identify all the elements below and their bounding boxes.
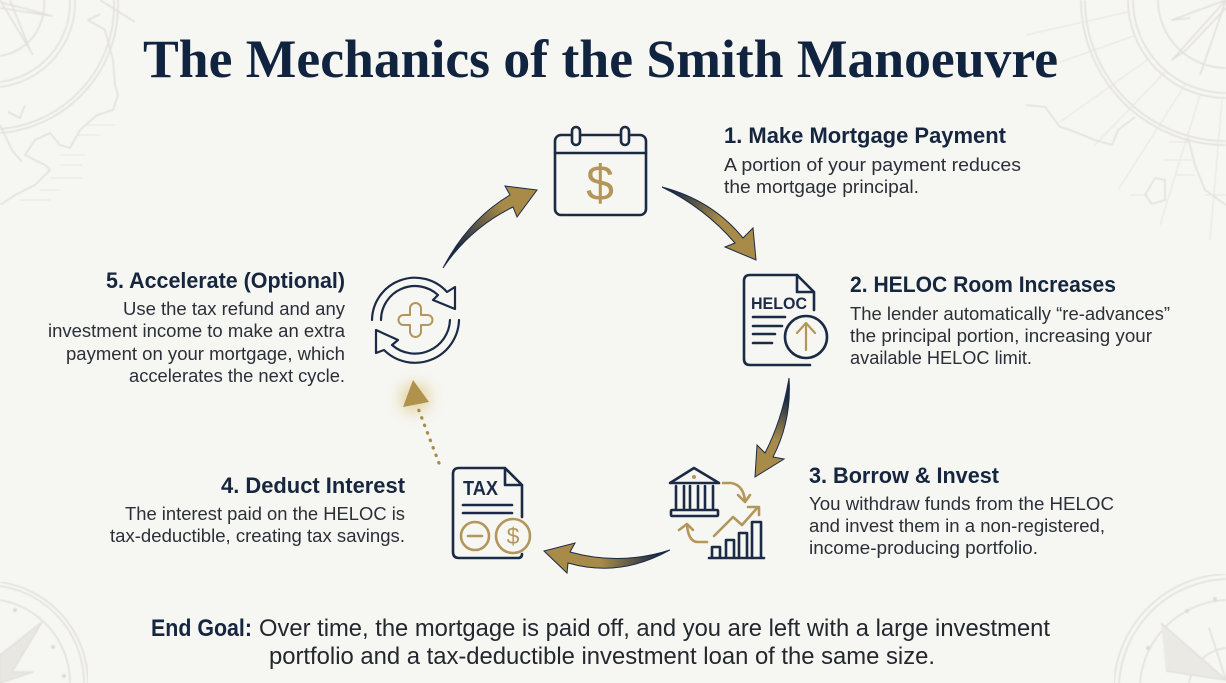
description: step 2: the principal portion, increasing your (850, 325, 1152, 346)
description: step 5: accelerates the next cycle. (129, 365, 345, 386)
heading: step 1: 1. Make Mortgage Payment (724, 123, 1007, 148)
description: step 2: available HELOC limit. (850, 347, 1032, 368)
icon: calendar with dollar sign (555, 127, 646, 215)
heading: step 3: 3. Borrow & Invest (809, 463, 1000, 488)
arrow: step 3 to step 4 (544, 543, 670, 573)
icon: cycle with plus (372, 278, 459, 363)
description: step 5: investment income to make an extra (48, 320, 346, 341)
description: step 4: tax-deductible, creating tax savings. (110, 525, 405, 546)
icon: tax document: TAX (463, 478, 499, 500)
step 5 text (48, 268, 346, 386)
description: step 2 (850, 303, 1170, 368)
arrow: step 1 to step 2 (662, 187, 756, 260)
decoration: bottom-left compass (0, 582, 88, 683)
description: step 2: The lender automatically “re-advances” (850, 303, 1170, 324)
end goal statement (151, 615, 1050, 670)
step 4 text (110, 473, 406, 546)
description: step 4 (110, 503, 405, 546)
description: step 1: A portion of your payment reduces (724, 154, 1021, 175)
description: step 5: Use the tax refund and any (123, 298, 346, 319)
icon: calendar with dollar sign: $ (586, 155, 614, 211)
end goal statement: Over time, the mortgage is paid off, and you are left with a large investment (259, 615, 1050, 642)
arrow: step 2 to step 3 (755, 378, 789, 477)
description: step 1 (724, 154, 1021, 197)
description: step 5 (48, 298, 346, 386)
end goal statement: End Goal: (151, 615, 252, 642)
description: step 5: payment on your mortgage, which (66, 343, 345, 364)
title: The Mechanics of the Smith Manoeuvre (143, 29, 1058, 89)
description: step 3: and invest them in a non-registered, (809, 515, 1105, 536)
icon: HELOC document: HELOC (751, 294, 807, 313)
arrow: step 5 to step 1 (443, 186, 537, 268)
heading: step 5: 5. Accelerate (Optional) (106, 268, 345, 293)
heading: step 2: 2. HELOC Room Increases (850, 272, 1116, 297)
icon: HELOC document (744, 275, 827, 365)
step 2 text (850, 272, 1170, 368)
description: step 3: income-producing portfolio. (809, 537, 1038, 558)
description: step 3 (809, 493, 1114, 558)
arrow: dotted step 4 to step 5 (400, 380, 439, 463)
step 1 text (724, 123, 1021, 197)
step 3 text (809, 463, 1114, 558)
decoration: top-left compass and coastline (0, 0, 135, 205)
heading: step 4: 4. Deduct Interest (221, 473, 406, 498)
decoration: top-right compass and coastline (1026, 0, 1226, 240)
icon: tax document (453, 468, 530, 558)
description: step 1: the mortgage principal. (724, 176, 919, 197)
end goal statement: portfolio and a tax-deductible investment loan of the same size. (269, 643, 935, 670)
icon: tax document: $ (507, 523, 520, 549)
description: step 4: The interest paid on the HELOC is (125, 503, 405, 524)
description: step 3: You withdraw funds from the HELOC (809, 493, 1114, 514)
icon: bank and growth chart (670, 468, 764, 558)
decoration: bottom-right compass (1114, 574, 1226, 683)
